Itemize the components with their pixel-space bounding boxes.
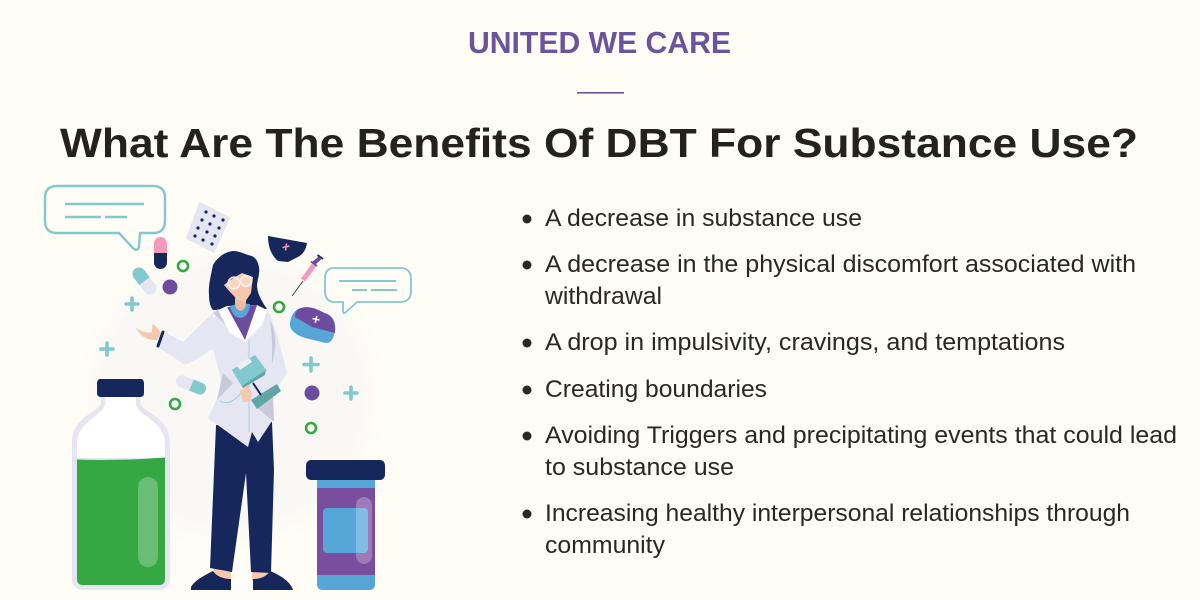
speech bubble right [325, 268, 411, 313]
icon: pill box [290, 307, 335, 343]
clipboard [251, 384, 281, 409]
purple shirt [227, 305, 257, 340]
fringe [226, 262, 256, 282]
large green bottle [72, 379, 170, 590]
title: What Are The Benefits Of DBT For Substance Use? [60, 120, 1138, 166]
benefit 4: Creating boundaries [545, 376, 767, 403]
icon: purple dot [162, 280, 178, 294]
icon: mortar bowl [268, 236, 307, 262]
neck and face [235, 290, 246, 311]
ankles [214, 566, 270, 581]
benefit 6: community [545, 532, 666, 559]
doctor figure [136, 251, 293, 590]
holding hand [240, 385, 252, 402]
collar [230, 303, 250, 318]
icon: green ring [306, 423, 316, 433]
benefit 3: A drop in impulsivity, cravings, and temptations [545, 329, 1065, 356]
cuff [158, 332, 163, 346]
illustration: doctor with medicine [45, 186, 411, 590]
trousers [210, 422, 274, 573]
coat shadows [217, 373, 233, 400]
benefit 6 [522, 500, 1130, 559]
benefit 6: Increasing healthy interpersonal relationships through [545, 500, 1130, 527]
icon: teal capsule [132, 268, 150, 288]
heading divider [577, 92, 624, 94]
icon: green ring [178, 261, 188, 271]
icon: plus [101, 343, 113, 355]
benefit 2 [522, 251, 1136, 310]
icon: plus [126, 298, 138, 310]
benefits list [522, 205, 1177, 559]
icon: small capsule [182, 382, 206, 394]
lab coat [208, 309, 287, 447]
benefit 2: A decrease in the physical discomfort associated with [545, 251, 1136, 278]
icon: plus [304, 358, 318, 371]
shoes [191, 571, 293, 590]
coat seams [248, 340, 250, 432]
icon: syringe [292, 255, 323, 296]
glasses [228, 276, 251, 289]
icon: blister pack [187, 203, 229, 252]
icon: plus [345, 387, 357, 399]
icon: green ring [170, 399, 180, 409]
icon: green ring [274, 302, 284, 312]
hand [136, 324, 161, 340]
hair [209, 251, 267, 310]
pill jar [306, 460, 385, 590]
coat lapels [218, 305, 267, 342]
benefit 1: A decrease in substance use [545, 205, 862, 232]
left arm sleeve [158, 313, 214, 365]
benefit 5 [522, 422, 1177, 481]
brand heading: UNITED WE CARE [468, 26, 731, 60]
speech bubble left [45, 186, 165, 250]
benefit 2: withdrawal [544, 283, 662, 310]
icon: purple dot [304, 386, 320, 400]
icon: pink and navy capsule [154, 237, 167, 269]
benefit 5: Avoiding Triggers and precipitating events that could lead [545, 422, 1177, 449]
benefit 5: to substance use [545, 454, 734, 481]
